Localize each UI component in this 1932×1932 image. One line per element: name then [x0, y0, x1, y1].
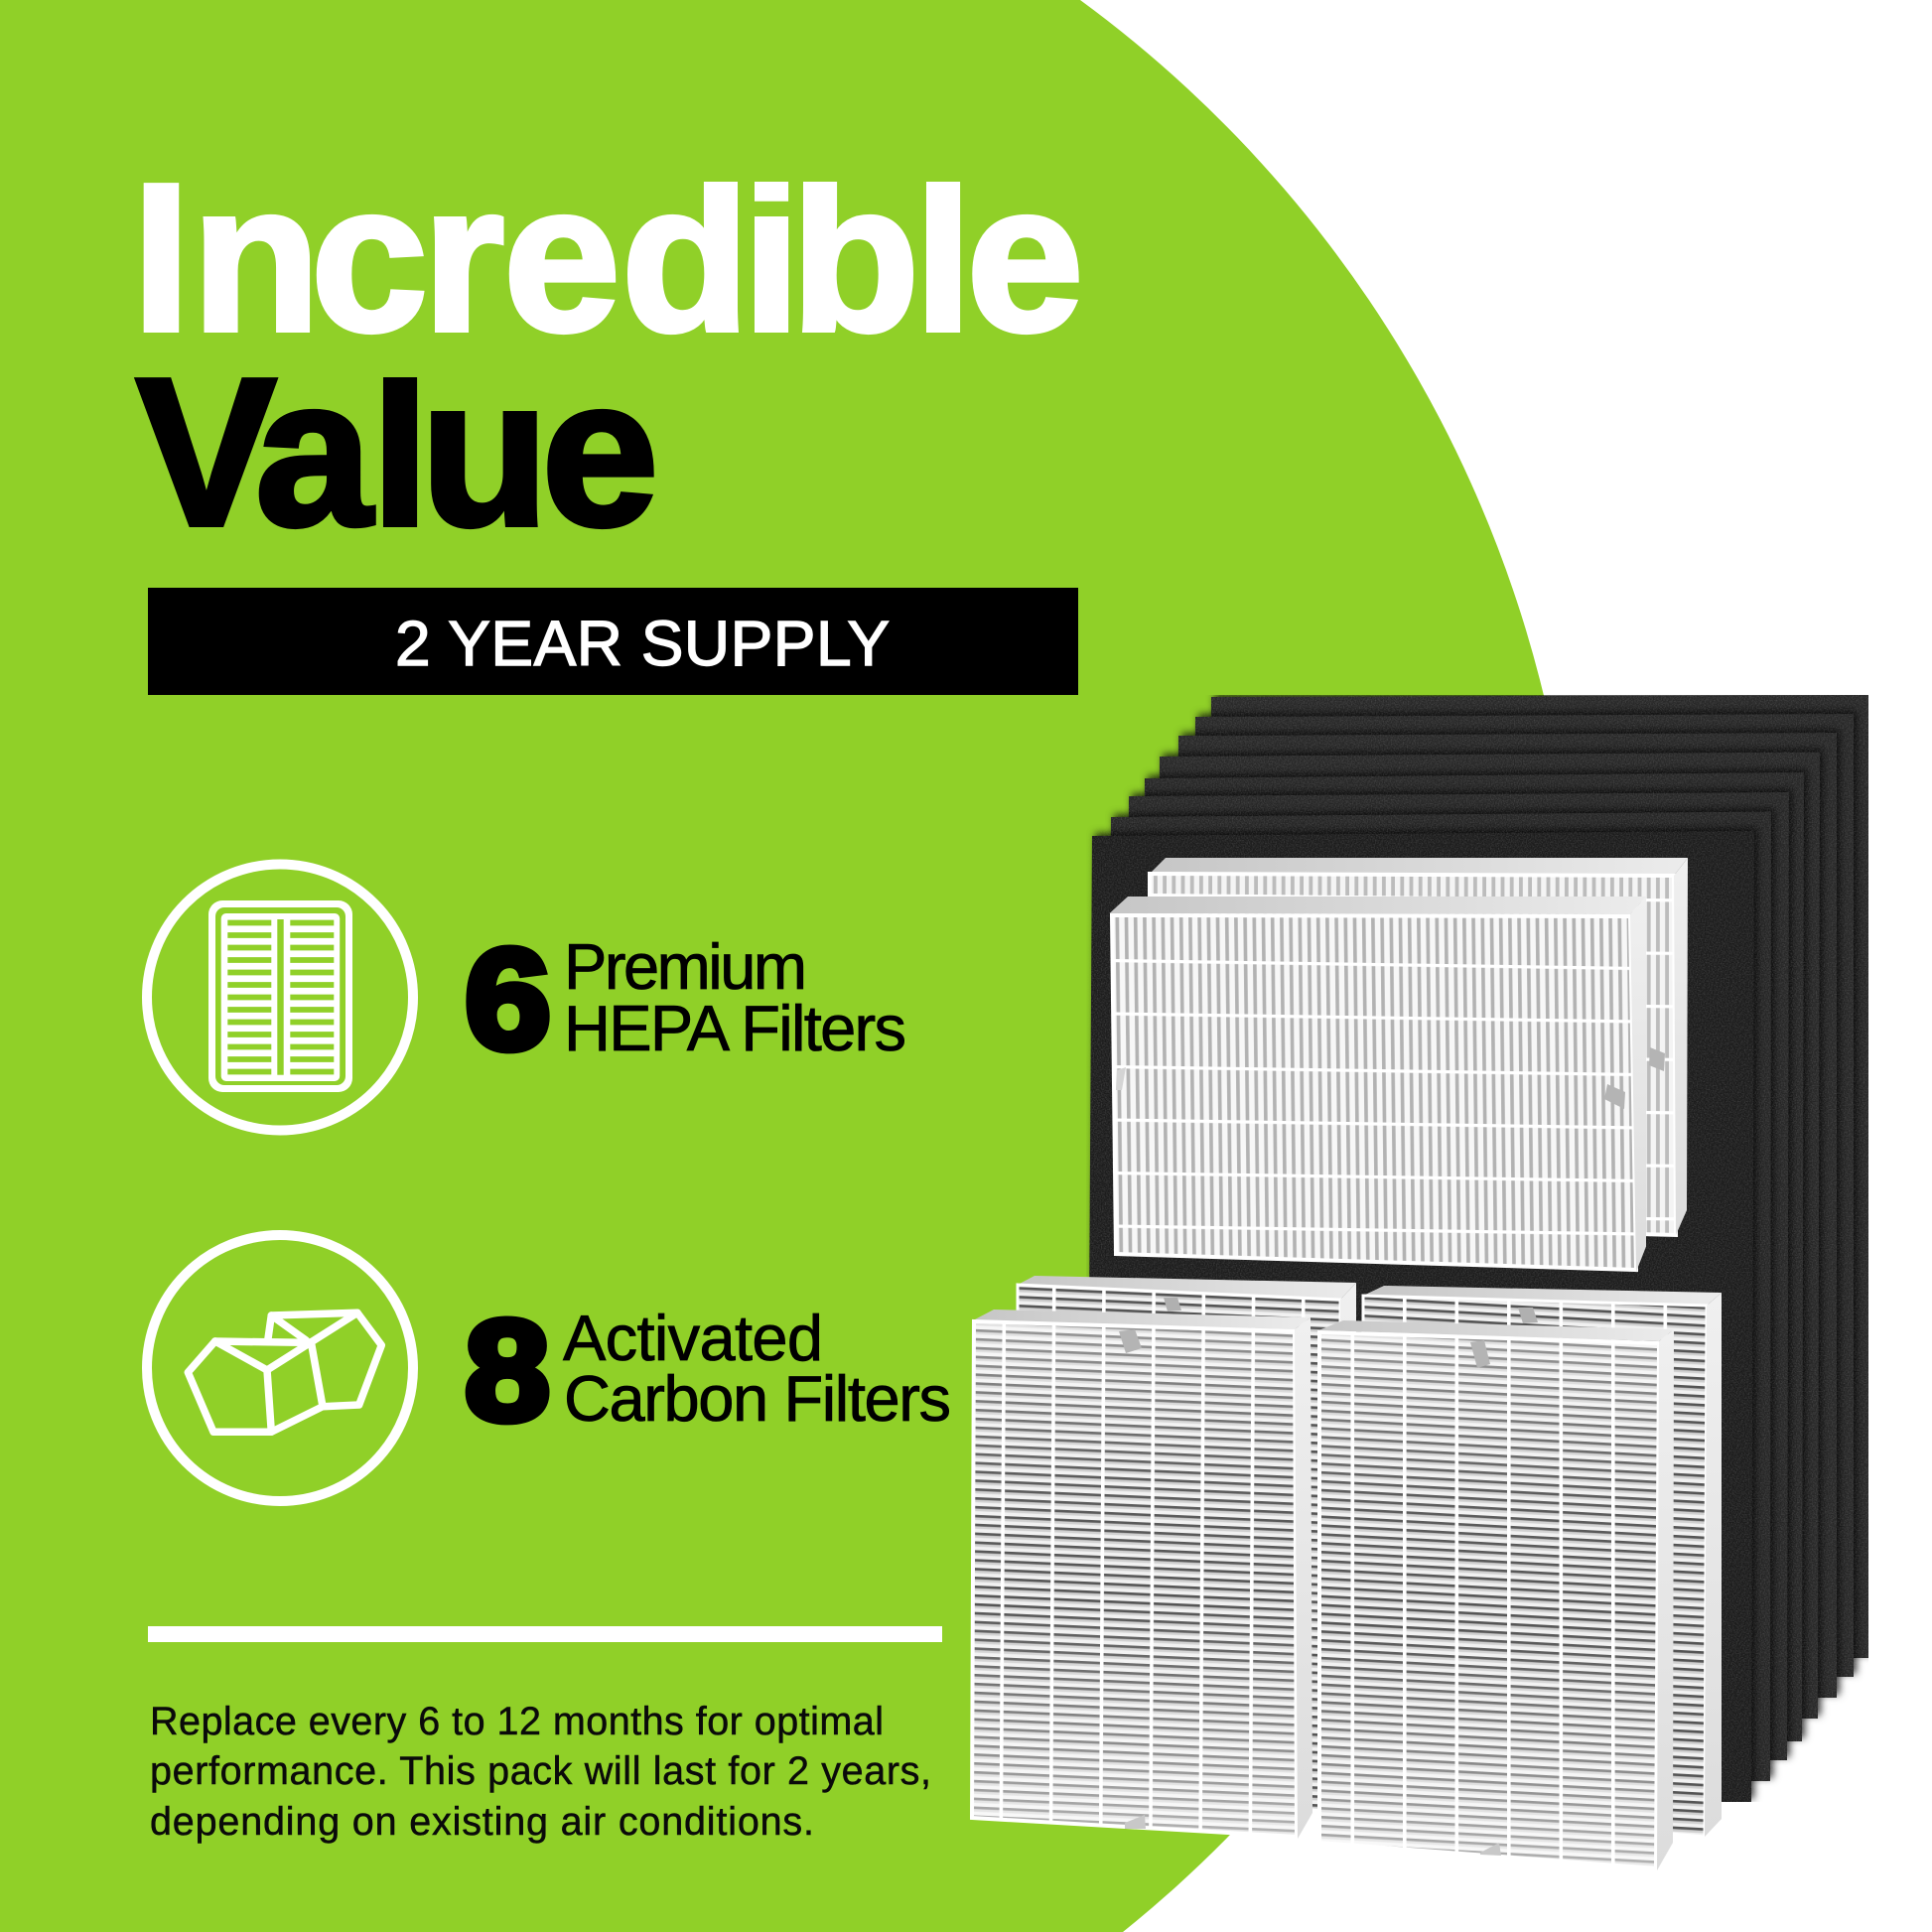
- top tab: [1119, 1329, 1142, 1353]
- top face: [974, 1310, 1311, 1329]
- top tab: [1470, 1340, 1490, 1368]
- icon: HEPA filter in circle: [147, 864, 413, 1130]
- shading overlay: [972, 1321, 1297, 1837]
- HEPA filter: rear right: [1363, 1286, 1722, 1837]
- top face: [1018, 1276, 1356, 1300]
- shading overlay: [1319, 1332, 1659, 1868]
- carbon foam sheet stack: [1086, 695, 1868, 1802]
- banner bar: [148, 588, 1078, 695]
- HEPA filter: front top: [1110, 897, 1646, 1272]
- label line: Activated: Activated: [563, 1302, 823, 1374]
- label line: Carbon Filters: Carbon Filters: [564, 1362, 951, 1435]
- label: 8 Activated Carbon Filters: [465, 1291, 951, 1450]
- side face: [1674, 858, 1688, 1235]
- tab: [1649, 1047, 1665, 1071]
- front face: [1319, 1332, 1659, 1868]
- front face: [1112, 915, 1636, 1270]
- side face: [1657, 1329, 1674, 1870]
- top face: [1110, 897, 1646, 914]
- tab: [1518, 1308, 1538, 1323]
- divider line: [148, 1626, 942, 1642]
- label line: HEPA Filters: HEPA Filters: [564, 992, 906, 1064]
- number 8: 8: [465, 1291, 550, 1450]
- cubes glyph: [188, 1312, 381, 1432]
- title line: Value: Value: [136, 334, 658, 570]
- side face: [1705, 1293, 1722, 1837]
- front face: [1150, 874, 1676, 1235]
- label line: Premium: Premium: [564, 930, 807, 1003]
- icon ring: [147, 864, 413, 1130]
- side face: [1295, 1317, 1312, 1839]
- top face: [1318, 1320, 1674, 1341]
- paragraph line 1: Replace every 6 to 12 months for optimal: [150, 1700, 884, 1743]
- HEPA filter: rear left: [1018, 1276, 1356, 1812]
- title line: Incredible: Incredible: [132, 139, 1083, 375]
- bottom tab: [1125, 1815, 1146, 1829]
- paragraph line 2: performance. This pack will last for 2 years,: [150, 1749, 931, 1793]
- tab: [1164, 1298, 1181, 1311]
- paragraph: replacement note: [150, 1700, 931, 1844]
- front face: [972, 1321, 1297, 1837]
- HEPA filter: front left: [972, 1310, 1312, 1839]
- paragraph line 3: depending on existing air conditions.: [150, 1800, 814, 1844]
- icon: carbon cubes in circle: [147, 1235, 413, 1501]
- filter glyph: [208, 900, 352, 1092]
- front face: [1018, 1285, 1340, 1812]
- title: Incredible Value: [133, 182, 1079, 530]
- number 6: 6: [465, 919, 551, 1079]
- tab right: [1604, 1084, 1625, 1109]
- banner: 2 year supply: [148, 588, 1078, 695]
- banner text: 2 YEAR SUPPLY: [395, 608, 890, 679]
- side face: [1340, 1283, 1356, 1812]
- label: 6 Premium HEPA Filters: [465, 919, 906, 1079]
- front face: [1363, 1296, 1707, 1837]
- top face: [1150, 858, 1688, 876]
- HEPA filter: front right: [1318, 1320, 1674, 1870]
- top face: [1363, 1286, 1722, 1306]
- icon ring: [147, 1235, 413, 1501]
- tab left: [1116, 1067, 1126, 1090]
- bottom tab: [1480, 1843, 1501, 1856]
- HEPA filter: rear top: [1150, 858, 1688, 1235]
- side face: [1630, 897, 1646, 1272]
